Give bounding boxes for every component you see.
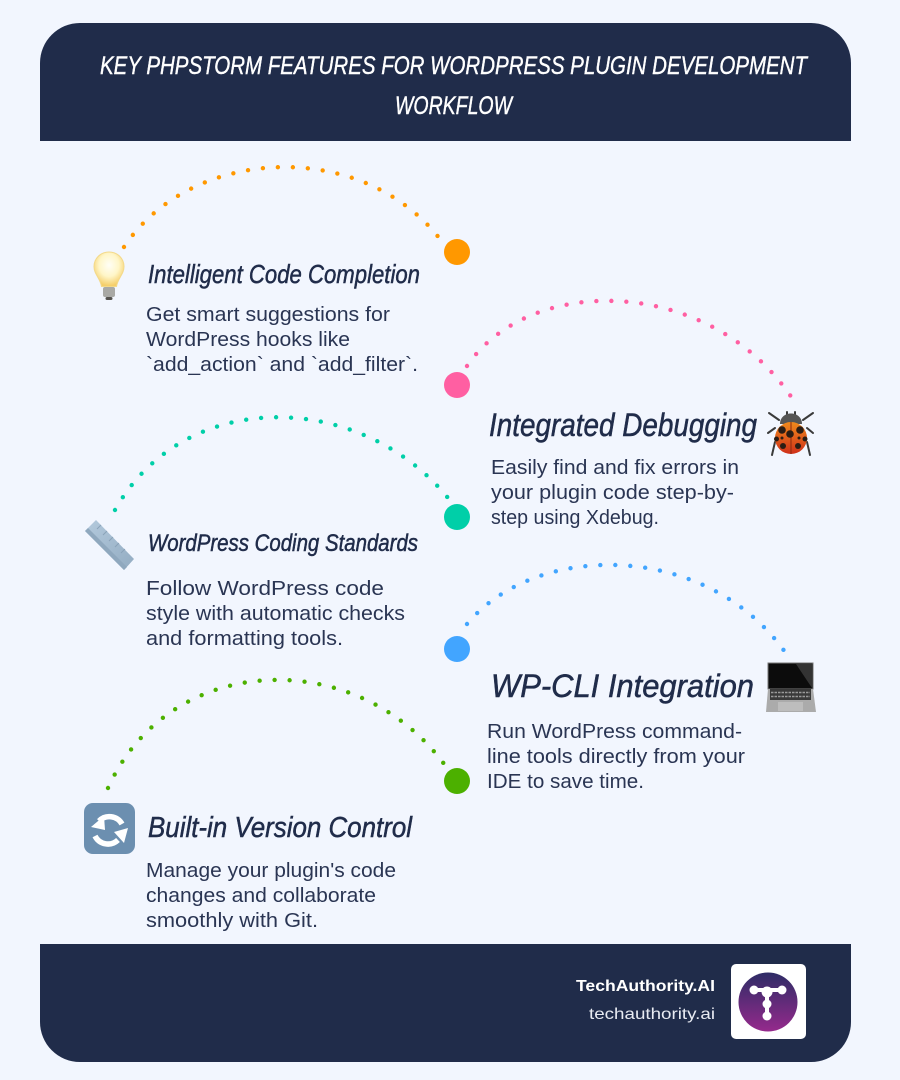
heading: Built-in Version Control [148, 812, 413, 844]
description: line tools directly from your [487, 746, 745, 768]
feature: Built-in Version Control [84, 680, 470, 932]
dotted arc: green [108, 680, 447, 788]
description: Easily find and fix errors in [491, 457, 739, 479]
description [146, 578, 405, 650]
description [146, 860, 396, 932]
description: Get smart suggestions for [146, 304, 390, 326]
footer banner [40, 944, 851, 1062]
icon: sync arrows [84, 803, 135, 854]
description [146, 304, 418, 376]
feature: Intelligent Code Completion [94, 167, 470, 376]
heading: Integrated Debugging [489, 407, 757, 443]
node: pink [444, 372, 470, 398]
node: blue [444, 636, 470, 662]
brand name: TechAuthority.AI [576, 978, 715, 995]
description: your plugin code step-by- [491, 482, 734, 504]
description: Manage your plugin's code [146, 860, 396, 882]
dotted arc: orange [124, 167, 440, 247]
description [487, 721, 745, 793]
description: `add_action` and `add_filter`. [146, 354, 418, 376]
icon: ladybug [768, 412, 813, 455]
title: WORKFLOW [395, 92, 514, 120]
description: step using Xdebug. [491, 507, 659, 529]
feature: Integrated Debugging [444, 301, 813, 529]
node: green [444, 768, 470, 794]
description: and formatting tools. [146, 628, 343, 650]
description: Run WordPress command- [487, 721, 742, 743]
icon: light bulb [94, 252, 124, 300]
heading: WordPress Coding Standards [148, 530, 418, 557]
logo [731, 964, 806, 1039]
description: changes and collaborate [146, 885, 376, 907]
description: smoothly with Git. [146, 910, 318, 932]
feature: WP-CLI Integration [444, 565, 816, 793]
feature: WordPress Coding Standards [85, 417, 470, 650]
icon: ruler [85, 520, 134, 570]
header banner [40, 23, 851, 141]
description: IDE to save time. [487, 771, 644, 793]
description: Follow WordPress code [146, 578, 384, 600]
icon: laptop [766, 663, 816, 712]
heading: WP-CLI Integration [491, 668, 754, 704]
dotted arc: teal [115, 417, 452, 510]
heading: Intelligent Code Completion [148, 259, 420, 289]
brand url: techauthority.ai [589, 1006, 715, 1023]
node: teal [444, 504, 470, 530]
description [491, 457, 739, 529]
node: orange [444, 239, 470, 265]
description: WordPress hooks like [146, 329, 350, 351]
title [100, 52, 808, 120]
description: style with automatic checks [146, 603, 405, 625]
dotted arc: blue [467, 565, 785, 652]
dotted arc: pink [467, 301, 792, 398]
